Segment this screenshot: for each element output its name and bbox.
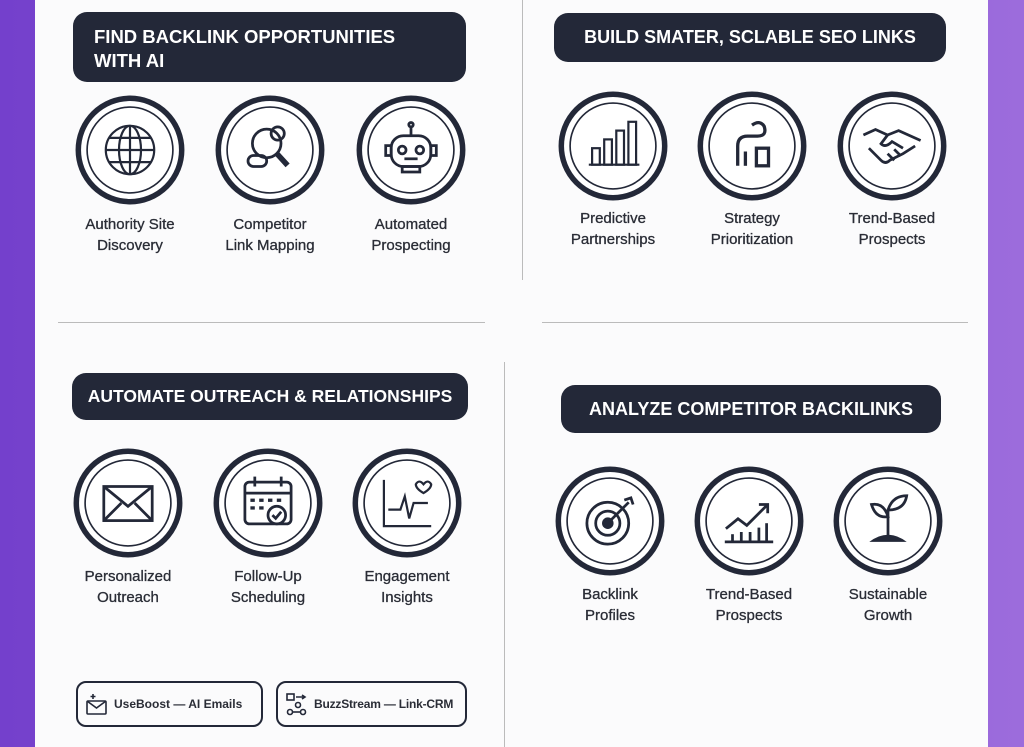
icon: engagement chart (352, 448, 462, 558)
label: automated (371, 216, 451, 254)
label: follow-up (231, 568, 305, 606)
label: competitor: Link Mapping (225, 237, 315, 254)
icon: envelope (74, 448, 182, 558)
header: find backlink (73, 12, 466, 82)
button: buzzstream: BuzzStream — Link-CRM (314, 697, 453, 711)
header: analyze competitor (561, 385, 941, 433)
label: backlink profiles: Backlink (582, 586, 638, 603)
label: predictive: Predictive (580, 210, 646, 227)
header: find backlink: FIND BACKLINK OPPORTUNITIES (94, 26, 395, 47)
label: authority: Discovery (97, 237, 163, 254)
label: trend-based 2: Prospects (716, 607, 782, 624)
icon: robot (356, 96, 466, 204)
label: sustainable: Sustainable (849, 586, 927, 603)
icon: target (556, 466, 664, 576)
icon: magnifier link (216, 96, 324, 204)
header: find backlink: WITH AI (94, 50, 164, 71)
header: analyze competitor: ANALYZE COMPETITOR BACKILINKS (589, 399, 913, 419)
label: engagement: Insights (381, 589, 433, 606)
label: strategy: Prioritization (711, 231, 793, 248)
label: follow-up: Follow-Up (234, 568, 302, 585)
label: authority (85, 216, 175, 254)
label: strategy (711, 210, 793, 248)
button: useboost: UseBoost — AI Emails (114, 697, 242, 711)
button: useboost (76, 681, 263, 727)
icon: sprout (834, 466, 942, 576)
label: backlink profiles (582, 586, 638, 624)
label: trend-based: Trend-Based (849, 210, 935, 227)
label: trend-based 2: Trend-Based (706, 586, 792, 603)
header: build smarter (554, 13, 946, 62)
label: follow-up: Scheduling (231, 589, 305, 606)
button: buzzstream (276, 681, 467, 727)
icon: bar chart (558, 92, 668, 200)
label: personalized (85, 568, 171, 606)
label: strategy: Strategy (724, 210, 780, 227)
label: trend-based: Prospects (859, 231, 925, 248)
label: engagement: Engagement (364, 568, 450, 585)
label: sustainable (849, 586, 927, 624)
label: engagement (364, 568, 450, 606)
label: sustainable: Growth (864, 607, 912, 624)
icon: trend (694, 466, 804, 576)
label: trend-based 2 (706, 586, 792, 624)
icon: calendar (214, 448, 322, 558)
header: build smarter: BUILD SMATER, SCLABLE SEO LINKS (584, 27, 916, 47)
label: competitor (225, 216, 315, 254)
icon: strategy (698, 92, 806, 200)
label: trend-based (849, 210, 935, 248)
label: automated: Prospecting (371, 237, 451, 254)
label: automated: Automated (375, 216, 447, 233)
label: competitor: Competitor (233, 216, 307, 233)
label: predictive: Partnerships (571, 231, 655, 248)
label: personalized: Outreach (97, 589, 159, 606)
label: predictive (571, 210, 655, 248)
label: backlink profiles: Profiles (585, 607, 635, 624)
icon: globe (76, 96, 184, 204)
label: authority: Authority Site (85, 216, 175, 233)
header: automate outreach (72, 373, 468, 420)
label: personalized: Personalized (85, 568, 171, 585)
header: automate outreach: AUTOMATE OUTREACH & RELATIONSHIPS (88, 386, 452, 406)
icon: handshake (838, 92, 946, 200)
